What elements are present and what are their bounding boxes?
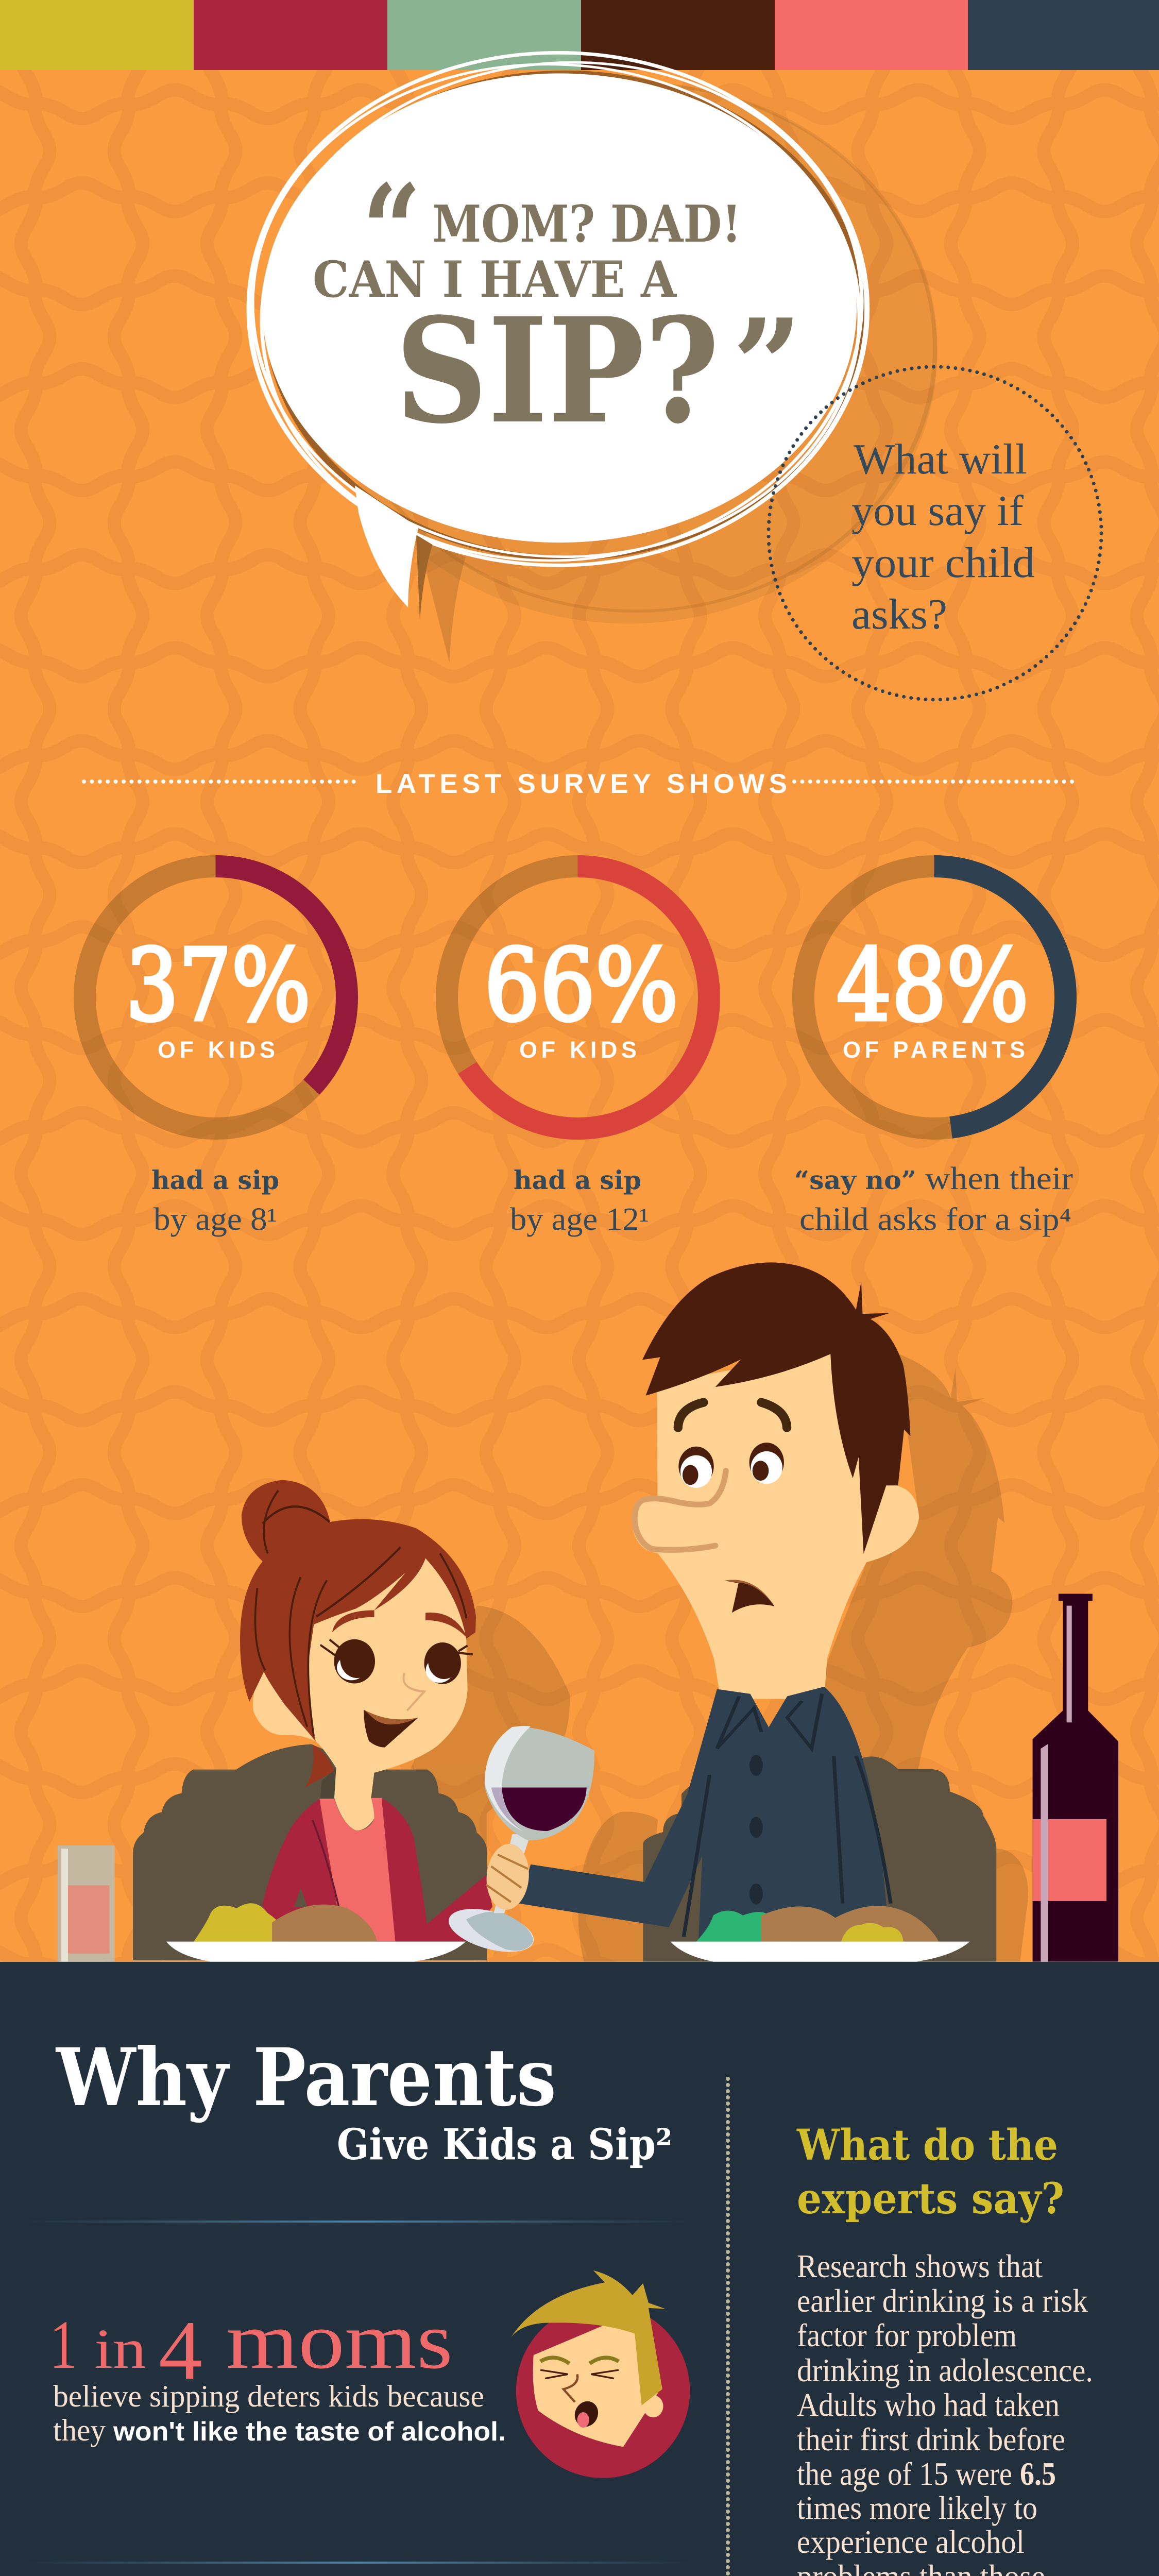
stat body: they: [53, 2413, 106, 2447]
illustration: family at dinner: [58, 1262, 1118, 1961]
stat captions: had a sip: [514, 1165, 641, 1195]
experts body text: the age of 15 were: [797, 2455, 1012, 2492]
man's mouth: [725, 1580, 775, 1613]
stat ring: 37%: [84, 867, 347, 1128]
bubble headline: [313, 157, 802, 456]
dark section background: [0, 1962, 1159, 2576]
man's face, ear and neck: [633, 1352, 919, 1699]
man's nose: [635, 1471, 726, 1550]
bubble headline: CAN I HAVE A: [313, 250, 677, 309]
experts body text: their first drink before: [797, 2421, 1065, 2458]
food, plates, drink and bottle: [58, 1594, 1118, 1961]
stat ring: 48%: OF PARENTS: [843, 1037, 1025, 1063]
experts body text: 6.5: [1020, 2455, 1056, 2492]
heading: what do the experts say: [796, 2121, 1064, 2224]
heading: why parents give kids a sip: [55, 2031, 672, 2170]
bubble rim: [228, 46, 893, 578]
experts body text: drinking in adolescence.: [797, 2352, 1093, 2388]
orange background with lattice pattern: [0, 70, 1159, 1962]
heading: why parents give kids a sip: Why Parents: [55, 2031, 556, 2124]
plates: [166, 1942, 970, 1961]
experts body text: earlier drinking is a risk: [797, 2282, 1088, 2319]
experts body text: [797, 2248, 1093, 2576]
woman's nose: [403, 1673, 424, 1710]
stat ring: 37%: OF KIDS: [158, 1037, 275, 1063]
bubble shadow: [319, 81, 938, 663]
heading: why parents give kids a sip: Give Kids a Sip²: [337, 2120, 672, 2170]
food on plates: [194, 1903, 939, 1942]
dotted callout circle: [769, 367, 1101, 700]
experts body text: Adults who had taken: [797, 2386, 1060, 2423]
woman's mouth: [364, 1709, 418, 1748]
man's hair: [642, 1262, 910, 1554]
dividers: [23, 2221, 713, 2576]
experts body text: times more likely to: [797, 2489, 1037, 2526]
vertical dotted divider: [726, 2079, 730, 2576]
stat body: believe sipping deters kids because: [53, 2379, 484, 2413]
callout question: [851, 435, 1035, 638]
stat: 1 in 4 moms: [49, 2296, 506, 2447]
stat ring: 66%: [447, 867, 709, 1128]
speech bubble: [228, 46, 938, 663]
stat captions: “say no”: [794, 1165, 916, 1195]
callout question: your child: [851, 539, 1035, 587]
stat captions: child asks for a sip⁴: [799, 1202, 1071, 1237]
callout question: What will: [854, 435, 1027, 483]
bubble fill and tail: [262, 74, 857, 621]
bubble headline: ”: [732, 291, 802, 439]
right chair: [643, 1756, 996, 1961]
man's eyes: [678, 1443, 784, 1488]
stat ring: 48%: 48%: [837, 928, 1029, 1043]
experts body text: experience alcohol: [797, 2523, 1025, 2560]
callout question: you say if: [851, 487, 1024, 535]
man's shirt: [519, 1687, 891, 1941]
stat heading: [49, 2296, 453, 2397]
woman's hair strands: [255, 1490, 466, 1736]
experts body text: Research shows that: [797, 2248, 1043, 2284]
woman's face and neck: [309, 1558, 468, 1831]
bubble headline: “: [362, 157, 421, 305]
woman's top: [263, 1798, 492, 1941]
stat heading: moms: [226, 2296, 453, 2386]
icon: boy tasting alcohol: [510, 2270, 690, 2478]
man's buttons: [749, 1755, 763, 1904]
stat ring: 66%: 66%: [484, 928, 678, 1043]
stat captions: [151, 1161, 1073, 1237]
woman's eyes: [320, 1639, 473, 1684]
stat captions: by age 8¹: [154, 1202, 277, 1237]
bubble headline: MOM? DAD!: [432, 195, 741, 254]
man's head: [633, 1262, 919, 1699]
stat heading: 1: [49, 2307, 77, 2383]
stat heading: in: [94, 2317, 146, 2380]
wine bottle: [1033, 1594, 1118, 1961]
stat ring: 48%: [804, 867, 1065, 1128]
top colour bars: [0, 0, 1159, 70]
stat heading: 4: [159, 2304, 202, 2397]
stat body: won't like the taste of alcohol.: [113, 2417, 506, 2447]
left chair: [133, 1744, 487, 1960]
stat captions: when their: [925, 1161, 1073, 1196]
stat ring: 66%: OF KIDS: [519, 1037, 637, 1063]
wall shadows: table side: [578, 1812, 1028, 1961]
bubble headline: SIP?: [395, 286, 720, 456]
heading: what do the experts say: What do the: [796, 2121, 1058, 2170]
woman's ear: [253, 1672, 315, 1741]
heading: what do the experts say: experts say?: [797, 2174, 1064, 2224]
wall shadows: woman and chairs: [411, 1605, 570, 1856]
survey heading: LATEST SURVEY SHOWS: [376, 769, 787, 799]
wall shadow: man: [781, 1353, 1012, 1772]
woman: [133, 1480, 492, 1960]
stat captions: had a sip: [151, 1165, 279, 1195]
neck shadow on chair: [320, 1768, 336, 1798]
callout question: asks?: [851, 590, 947, 638]
man's brows: [678, 1402, 787, 1428]
wine glass: [446, 1726, 594, 1960]
experts body text: factor for problem: [797, 2317, 1017, 2353]
drinking glass: [58, 1845, 114, 1961]
stat ring: 37%: 37%: [126, 928, 311, 1043]
woman's hair: [240, 1480, 476, 1788]
stat captions: by age 12¹: [510, 1202, 649, 1237]
hand holding glass: [483, 1840, 533, 1913]
stat body: [53, 2379, 506, 2447]
